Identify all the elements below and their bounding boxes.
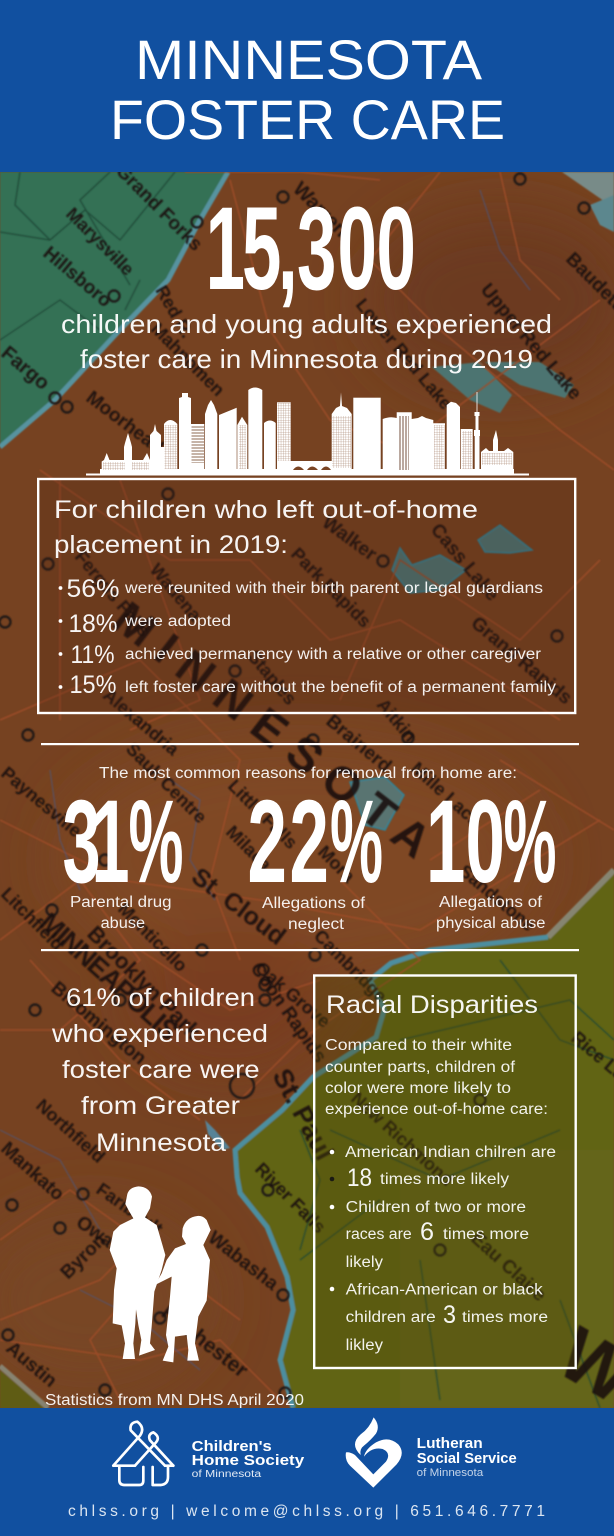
background map of Minnesota: Sauk Centre xyxy=(122,739,211,827)
background map of Minnesota: Mahnomen xyxy=(147,319,228,400)
outcome: 15% without permanent family: 15% xyxy=(70,671,116,699)
background map of Minnesota: Upper Red Lake xyxy=(476,280,585,404)
text block: 61% Greater Minnesota: from Greater xyxy=(81,1092,240,1120)
background map of Minnesota: Marysville xyxy=(62,204,138,279)
list: African-American or black: African-American or black xyxy=(346,1282,543,1298)
background map of Minnesota: Paynesville xyxy=(0,763,85,841)
outcome: 56% reunited xyxy=(59,575,543,603)
background map of Minnesota: Alexandria xyxy=(99,685,184,760)
stat: 22% neglect: Allegations of xyxy=(262,895,366,912)
list: two or more races: likely xyxy=(346,1254,383,1271)
background map of Minnesota: Bloomington xyxy=(47,978,150,1069)
background map of Minnesota: Wadena xyxy=(146,560,206,626)
list: African-American or black xyxy=(330,1282,548,1354)
panel heading: For children who left out-of-home xyxy=(54,496,478,524)
Children's Home Society name: Home Society xyxy=(192,1453,304,1469)
background map of Minnesota: Aitkin xyxy=(373,695,420,746)
background map of Minnesota: Northfield xyxy=(32,1095,109,1167)
list: two or more races: races are xyxy=(346,1226,412,1243)
background map of Minnesota: Wabasha xyxy=(204,1227,282,1295)
Lutheran Social Service name: Lutheran xyxy=(417,1435,483,1452)
Children's Home Society name: Children's xyxy=(192,1439,272,1455)
background map of Minnesota: Brooklyn Park xyxy=(82,921,206,1045)
background map of Minnesota: Fergus Falls xyxy=(71,547,154,641)
Lutheran Social Service name: Social Service xyxy=(417,1450,517,1467)
text block: 61% Greater Minnesota: Minnesota xyxy=(96,1129,226,1157)
headline description xyxy=(61,309,552,374)
panel heading: placement in 2019: xyxy=(54,531,288,559)
background map of Minnesota: Grand Rapids xyxy=(467,613,576,709)
background map of Minnesota: Park Rapids xyxy=(287,544,375,631)
Lutheran Social Service name xyxy=(417,1435,517,1479)
stat: 22% neglect: % xyxy=(330,776,383,908)
background map of Minnesota: Walker xyxy=(318,512,381,566)
list: American Indian children: 18 xyxy=(347,1164,372,1192)
footer band xyxy=(0,1408,614,1536)
headline description: children and young adults experienced xyxy=(61,309,552,339)
list: African-American or black: children are xyxy=(346,1309,436,1326)
background map of Minnesota: MINNEAPOLIS xyxy=(34,907,184,1047)
reasons for removal heading: The most common reasons for removal from home are: xyxy=(99,765,517,782)
outcome: 18% adopted xyxy=(59,610,231,638)
panel: racial disparities xyxy=(314,976,576,1368)
list: American Indian children xyxy=(330,1144,556,1192)
background map of Minnesota: Cass Lake xyxy=(426,520,503,605)
panel: children who left out-of-home placement xyxy=(38,479,575,713)
list: two or more races: Children of two or more xyxy=(346,1199,526,1216)
stat: 10% physical abuse: physical abuse xyxy=(436,915,546,932)
outcome: 18% adopted: were adopted xyxy=(124,613,231,630)
background map of Minnesota: Oak Grove xyxy=(251,958,334,1032)
background map of Minnesota: Austin xyxy=(2,1338,61,1392)
header band xyxy=(0,0,614,172)
text block: 61% Greater Minnesota xyxy=(51,984,268,1157)
Lutheran Social Service name: of Minnesota xyxy=(417,1467,484,1479)
title xyxy=(110,28,505,151)
panel heading: Racial Disparities xyxy=(326,991,538,1019)
background map of Minnesota: Moorhead xyxy=(82,387,167,459)
outcome: 56% reunited: 56% xyxy=(66,575,120,603)
background map of Minnesota: Brainerd xyxy=(322,711,395,777)
stat: 10% physical abuse: % xyxy=(504,776,556,908)
intro text xyxy=(325,1037,548,1118)
intro text: Compared to their white xyxy=(325,1037,512,1054)
text block: 61% Greater Minnesota: 61% of children xyxy=(66,984,255,1012)
background map of Minnesota: Cambridge xyxy=(310,926,391,1006)
background map of Minnesota: Little Falls xyxy=(224,776,301,853)
text block: 61% Greater Minnesota: who experienced xyxy=(51,1020,268,1048)
stat: 10% physical abuse: Allegations of xyxy=(439,894,543,911)
list: two or more races: 6 xyxy=(420,1218,434,1246)
background map of Minnesota: St. Cloud xyxy=(186,862,291,951)
title: FOSTER CARE xyxy=(110,88,505,151)
stat: 10% physical abuse xyxy=(426,775,556,932)
text block: 61% Greater Minnesota: foster care were xyxy=(62,1056,260,1084)
background map of Minnesota: Hillsboro xyxy=(39,243,115,312)
background map of Minnesota: Eau Claire xyxy=(467,1228,550,1306)
background map of Minnesota: Sandstone xyxy=(455,861,539,935)
background map of Minnesota: Lower Red Lake xyxy=(352,295,456,413)
list: American Indian children: American Indian chilren are xyxy=(345,1144,556,1161)
contact line: chlss.org | welcome@chlss.org | 651.646.7771 xyxy=(68,1503,545,1520)
background map of Minnesota: New Richmond xyxy=(347,1088,457,1190)
list: American Indian children: times more likely xyxy=(380,1171,509,1188)
background map of Minnesota: Staples xyxy=(244,647,300,709)
stat: 31% parental drug abuse: 31 xyxy=(63,777,130,908)
stat: 22% neglect: 22 xyxy=(248,775,329,907)
outcome: 15% without permanent family: left foster care without the benefit of a permanent family xyxy=(125,679,556,696)
intro text: experience out-of-home care: xyxy=(325,1101,548,1118)
outcome: 56% reunited: were reunited with their birth parent or legal guardians xyxy=(124,580,543,597)
outcome: 11% relative or caregiver xyxy=(59,641,541,669)
background map of Minnesota: MINNESOTA xyxy=(104,591,441,868)
background map of Minnesota: Mora xyxy=(314,842,359,887)
outcome: 18% adopted: 18% xyxy=(68,610,118,638)
Children's Home Society name xyxy=(192,1439,304,1480)
logo: Lutheran Social Service heart and flame xyxy=(346,1417,402,1488)
stat: 31% parental drug abuse: % xyxy=(128,776,184,908)
background map of Minnesota: Coon Rapids xyxy=(246,959,330,1067)
panel heading xyxy=(54,496,478,559)
background map of Minnesota: Mille Lacs xyxy=(407,758,485,831)
logo: Children's Home Society house icon xyxy=(113,1422,173,1485)
outcome: 11% relative or caregiver: 11% xyxy=(70,641,114,669)
stat: 31% parental drug abuse: abuse xyxy=(101,915,145,932)
intro text: color were more likely to xyxy=(325,1080,511,1097)
title: MINNESOTA xyxy=(135,28,483,91)
stat: 31% parental drug abuse xyxy=(63,776,183,932)
stat: 22% neglect: neglect xyxy=(288,916,345,933)
list: African-American or black: times more xyxy=(462,1309,548,1326)
background map of Minnesota: Byron xyxy=(57,1230,110,1284)
list: two or more races: times more xyxy=(443,1226,529,1243)
outcome: 11% relative or caregiver: achieved permanency with a relative or other caregiver xyxy=(125,646,541,663)
Children's Home Society name: of Minnesota xyxy=(192,1469,262,1480)
stat: 22% neglect xyxy=(248,775,383,933)
headline number 15,300: 15,300 xyxy=(206,182,416,314)
background map of Minnesota: St. Paul xyxy=(267,1064,340,1165)
background map of Minnesota: Warren xyxy=(288,178,352,242)
background map of Minnesota: Red R. xyxy=(152,282,197,341)
stat: 31% parental drug abuse: Parental drug xyxy=(70,894,172,911)
outcome: 15% without permanent family xyxy=(59,671,556,699)
intro text: counter parts, children of xyxy=(325,1059,516,1076)
list: African-American or black: likley xyxy=(346,1337,383,1354)
background map of Minnesota: Rochester xyxy=(157,1301,252,1382)
background map of Minnesota: Faribault xyxy=(93,1179,166,1239)
background map of Minnesota: Milaca xyxy=(222,822,276,875)
icon: two children silhouette xyxy=(110,1186,211,1362)
list: two or more races xyxy=(330,1199,529,1271)
background map of Minnesota: Grand Forks xyxy=(111,161,206,255)
icon: Minneapolis skyline xyxy=(86,388,529,476)
list: African-American or black: 3 xyxy=(443,1301,456,1329)
background map of Minnesota: River Falls xyxy=(251,1159,330,1237)
background map of Minnesota: Monticello xyxy=(114,899,191,976)
source note: Statistics from MN DHS April 2020 xyxy=(45,1392,304,1409)
stat: 10% physical abuse: 10 xyxy=(426,775,505,907)
headline description: foster care in Minnesota during 2019 xyxy=(80,344,533,374)
background map of Minnesota: Owatonna xyxy=(72,1212,160,1282)
